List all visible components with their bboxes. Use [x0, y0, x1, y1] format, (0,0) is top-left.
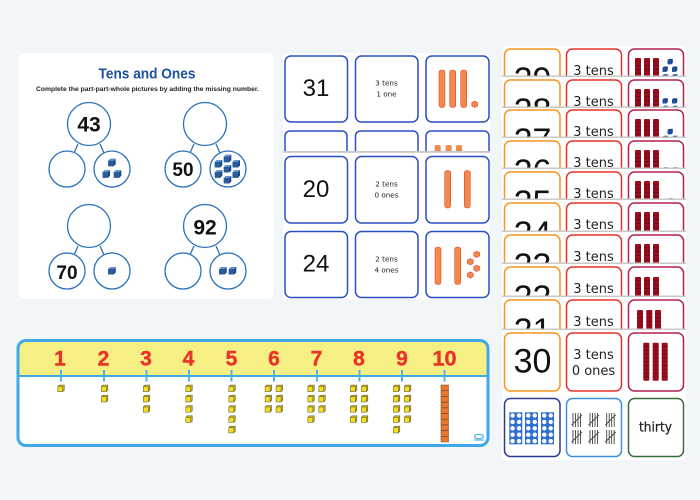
number labels: 2 — [98, 348, 109, 370]
card row: 31: 1 one — [376, 90, 397, 98]
panel: number thirty cards stack — [502, 46, 686, 460]
panel: blue matching cards — [283, 53, 490, 299]
card: thirty word: thirty — [639, 420, 672, 436]
strip: 29 — [504, 48, 684, 99]
number labels: 8 — [353, 348, 365, 370]
strip: 21 — [504, 299, 684, 350]
part-whole: 70 with one: 70 — [56, 263, 78, 284]
orange ten rod — [441, 385, 448, 442]
number labels: 1 — [54, 348, 66, 370]
strip: 25: 3 tens — [573, 187, 614, 202]
strip: 23 — [504, 234, 684, 285]
strip: 28: 28 — [514, 92, 551, 130]
card row: 24 — [303, 247, 480, 284]
strip: 25: 25 — [514, 184, 551, 222]
card row: partly hidden rods — [435, 145, 462, 153]
strip: 24 — [504, 202, 684, 253]
card row: 24: 2 tens — [375, 254, 398, 264]
card row: 30: 0 ones — [572, 364, 615, 379]
number labels: 10 — [432, 348, 456, 370]
card: tally marks — [566, 398, 622, 456]
card row: 30: 30 — [514, 342, 551, 380]
card: thirty word — [628, 398, 684, 456]
number labels — [54, 348, 456, 370]
number labels: 6 — [268, 348, 280, 370]
card row: 20 — [303, 170, 470, 208]
worksheet instructions: Complete the part-part-whole pictures by adding the missing number. — [36, 86, 259, 93]
strip: 27: 3 tens — [573, 125, 614, 140]
number labels: 5 — [226, 348, 238, 370]
number labels: 7 — [311, 348, 322, 370]
strip: 23: 3 tens — [573, 250, 614, 265]
panel: number line one to ten — [18, 340, 488, 446]
tick marks — [60, 370, 446, 382]
yellow unit cubes — [58, 385, 411, 433]
part-whole: 43: 43 — [77, 114, 101, 136]
part-whole: 50 with seven ones: 50 — [172, 160, 194, 181]
worksheet title: Tens and Ones — [98, 66, 196, 82]
card row: 24: 24 — [303, 250, 329, 278]
strip: 27: 27 — [514, 122, 551, 160]
strip: 27 — [504, 109, 684, 160]
strip: 21: 3 tens — [573, 315, 614, 330]
strip: 28 — [504, 79, 684, 130]
strip: 21: 21 — [514, 312, 551, 350]
strip: 22: 3 tens — [573, 282, 614, 297]
strip: 29: 29 — [514, 61, 551, 99]
strip: 25 — [504, 171, 684, 222]
part-whole: 70 with one — [49, 204, 130, 289]
card row: 24: 4 ones — [375, 266, 399, 274]
card row: 20: 0 ones — [375, 190, 399, 200]
card row: 31: 3 tens — [375, 78, 398, 88]
number labels: 3 — [140, 348, 152, 370]
panel: tens and ones worksheet — [19, 53, 274, 299]
card row: 20: 20 — [303, 176, 329, 203]
card row: 30 — [504, 333, 684, 391]
strip: 26 — [504, 140, 684, 191]
part-whole: 92 — [165, 204, 246, 289]
number labels: 4 — [183, 348, 195, 370]
icon: logo — [474, 434, 484, 440]
card row: 31 — [303, 70, 478, 108]
strip: 22 — [504, 266, 684, 317]
strip: 22: 22 — [514, 279, 551, 317]
strip: 23: 23 — [514, 247, 551, 285]
strip: 29: 3 tens — [573, 64, 614, 79]
strip: 28: 3 tens — [573, 95, 614, 110]
part-whole: 43 — [49, 102, 130, 187]
part-whole: 50 with seven ones — [165, 102, 246, 187]
strip: 26: 26 — [514, 153, 551, 191]
card row: 31: 31 — [303, 75, 329, 102]
number labels: 9 — [396, 348, 408, 370]
strip: 24: 3 tens — [573, 218, 614, 233]
part-whole: 92: 92 — [193, 216, 217, 240]
card: ten frames — [504, 398, 560, 456]
card row: 30: 3 tens — [573, 348, 614, 363]
card row: 20: 2 tens — [375, 180, 398, 188]
strip: 24: 24 — [514, 215, 551, 253]
strip: 26: 3 tens — [573, 156, 614, 171]
